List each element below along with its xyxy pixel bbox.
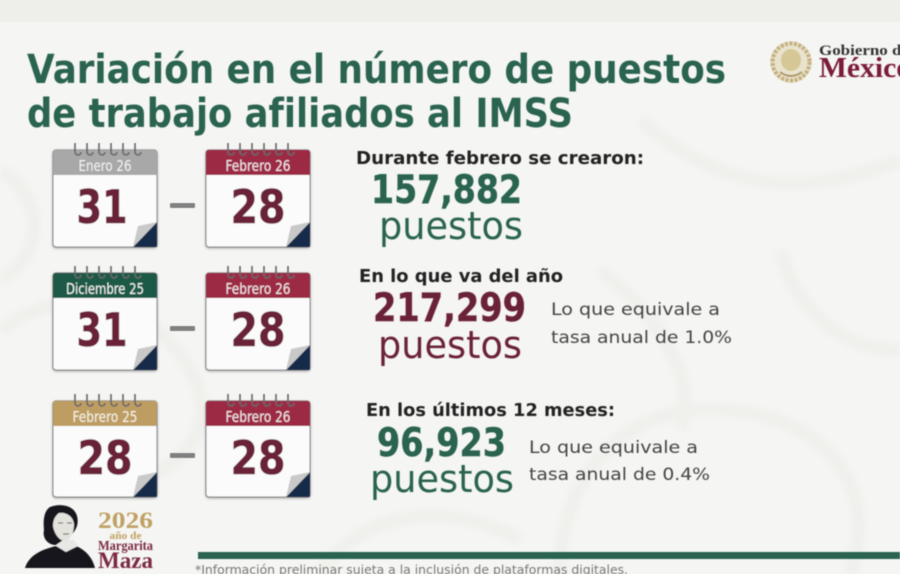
icon: national emblem [770,41,812,83]
text block: en lo que va del año: puestos [378,323,522,367]
text block: en lo que va del año: 217,299 [373,286,526,331]
calendar: Enero 26, day 31 [53,143,157,247]
footer bar [198,552,900,559]
arrow: minus sign [170,326,195,331]
text block: en lo que va del año: tasa anual de 1.0% [551,328,732,348]
calendar: Febrero 26, day 28: 28 [230,180,286,234]
calendar: Febrero 26, day 28: Febrero 26 [226,408,290,426]
calendar: Febrero 26, day 28 [206,143,310,247]
text block: últimos 12 meses: puestos [370,457,514,501]
text block: últimos 12 meses: Lo que equivale a [529,438,698,458]
logo: Gobierno de México: Gobierno de [819,43,900,59]
calendar: Enero 26, day 31: Enero 26 [78,157,132,175]
text block: febrero: Durante febrero se crearon: [356,148,644,169]
badge: 2026 año de Margarita Maza: Maza [98,548,153,573]
arrow: minus sign [170,453,195,458]
calendar: Diciembre 25, day 31 [53,266,157,370]
portrait: Margarita Maza [25,505,95,568]
text block: últimos 12 meses [366,400,710,501]
text block: febrero: puestos [379,204,523,248]
text block: últimos 12 meses: 96,923 [377,421,506,466]
title: Variación en el número de puestos [27,47,726,93]
calendar: Diciembre 25, day 31: Diciembre 25 [66,280,144,298]
badge: 2026 año de Margarita Maza [98,508,153,573]
calendar: Febrero 25, day 28: 28 [78,431,132,485]
text block: en lo que va del año: Lo que equivale a [551,300,720,320]
calendar: Febrero 26, day 28 [206,394,310,497]
title: de trabajo afiliados al IMSS [27,91,573,137]
calendar: Febrero 25, day 28 [53,394,157,497]
arrow: minus sign [170,203,195,208]
calendar: Febrero 25, day 28: Febrero 25 [72,408,138,426]
text block: febrero [356,148,644,248]
badge: 2026 año de Margarita Maza: 2026 [98,508,153,533]
calendar: Febrero 26, day 28 [206,266,310,370]
text block: últimos 12 meses: tasa anual de 0.4% [529,465,710,485]
title [27,47,726,137]
calendar: Enero 26, day 31: 31 [76,180,128,234]
text block: en lo que va del año: En lo que va del año [359,266,563,287]
badge: 2026 año de Margarita Maza: Margarita [98,538,153,553]
calendar: Febrero 26, day 28: 28 [230,303,286,357]
text block: últimos 12 meses: En los últimos 12 meses: [366,400,615,421]
text block: febrero: 157,882 [371,168,522,213]
calendar: Febrero 26, day 28: Febrero 26 [226,280,290,298]
calendar: Febrero 26, day 28: Febrero 26 [226,157,290,175]
logo: Gobierno de México [770,41,900,84]
calendar: Febrero 26, day 28: 28 [230,431,286,485]
badge: 2026 año de Margarita Maza: año de [110,531,142,542]
text block: en lo que va del año [359,266,732,367]
calendar: Diciembre 25, day 31: 31 [76,303,128,357]
